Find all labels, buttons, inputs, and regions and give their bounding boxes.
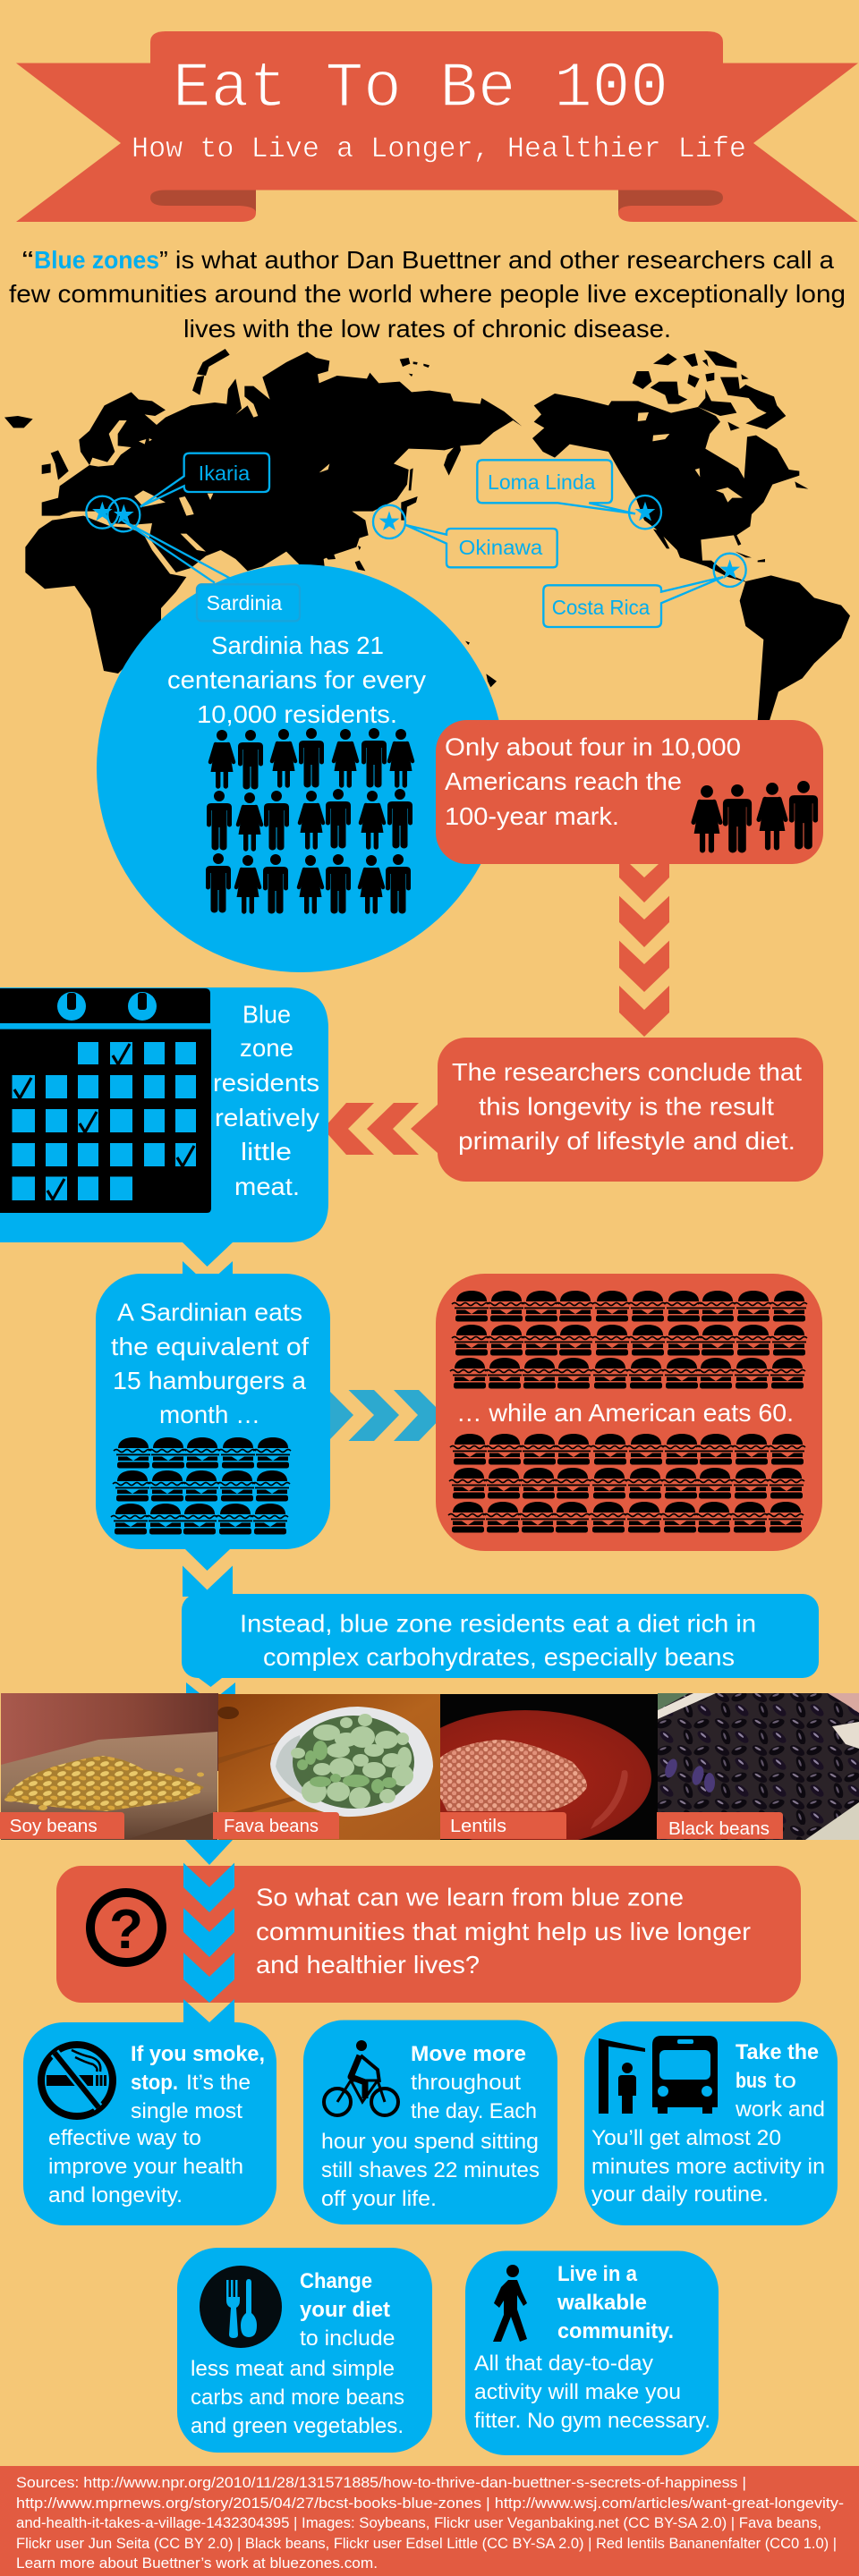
footer: sources xyxy=(0,2466,859,2576)
move text: throughout xyxy=(411,2071,521,2095)
question text: So what can we learn from blue zone xyxy=(256,1884,684,1911)
smoking text: effective way to xyxy=(48,2126,201,2150)
walkable text: walkable xyxy=(557,2291,647,2315)
label: fava beans: Fava beans xyxy=(224,1816,319,1836)
panel: only four in 10,000 Americans xyxy=(436,720,823,864)
panel: change your diet xyxy=(177,2248,432,2453)
diet text: to include xyxy=(300,2326,395,2351)
footer: sources: Sources: http://www.npr.org/2010/11/28/131571885/how-to-thrive-dan-buettner-s-secrets-of-happiness | xyxy=(16,2475,746,2491)
footer: sources: and-health-it-takes-a-village-1432304395 | Images: Soybeans, Flickr user Veganbaking.net (CC BY-SA 2.0) | Fava beans, xyxy=(16,2515,821,2531)
icon: question mark: ? xyxy=(109,1899,143,1961)
panel: instead, beans: Instead, blue zone residents eat a diet rich in xyxy=(240,1610,756,1637)
arrow: blue chevrons over question panel xyxy=(183,1863,234,2026)
photo: fava beans xyxy=(213,1694,440,1840)
callout outline: Costa Rica xyxy=(543,577,723,627)
callout outline: Okinawa xyxy=(405,525,557,567)
intro text: few communities around the world where people live exceptionally long xyxy=(9,280,846,308)
marker: Ikaria xyxy=(107,498,140,531)
sardinian text xyxy=(111,1299,309,1428)
question text xyxy=(256,1884,751,1979)
diet text: Change xyxy=(300,2269,372,2293)
little meat text: residents xyxy=(213,1069,319,1097)
diet text: and green vegetables. xyxy=(191,2414,404,2438)
footer: sources: Learn more about Buettner’s work at bluezones.com. xyxy=(16,2555,378,2572)
pictogram: 4 people xyxy=(693,781,818,853)
sardinia statistic text: 10,000 residents. xyxy=(197,700,397,728)
icon: cyclist xyxy=(324,2040,398,2115)
little meat text: relatively xyxy=(215,1104,319,1131)
walkable text: All that day-to-day xyxy=(474,2351,654,2376)
bus text: work and xyxy=(735,2097,825,2122)
photo: black beans xyxy=(657,1693,859,1840)
callout label: Okinawa: Okinawa xyxy=(459,536,542,559)
panel: researchers conclude: this longevity is the result xyxy=(479,1093,774,1120)
walkable text xyxy=(474,2262,710,2433)
sardinia statistic text: Sardinia has 21 xyxy=(211,631,384,659)
diet text: carbs and more beans xyxy=(191,2385,404,2410)
diet text xyxy=(191,2269,404,2438)
world map xyxy=(4,349,850,721)
panel: researchers conclude: primarily of lifestyle and diet. xyxy=(458,1127,795,1155)
pictogram: 60 hamburgers xyxy=(448,1291,807,1533)
intro text xyxy=(9,246,846,343)
little meat text: Blue xyxy=(242,1000,291,1029)
callout box: Sardinia xyxy=(197,584,300,621)
move text: the day. Each xyxy=(411,2099,537,2123)
question text: communities that might help us live longer xyxy=(256,1918,751,1945)
smoking text: improve your health xyxy=(48,2155,243,2179)
label: soy beans xyxy=(0,1812,124,1839)
arrow: blue pointer below photos xyxy=(185,1840,233,1865)
icon: calendar xyxy=(0,988,211,1213)
callout label: Ikaria: Ikaria xyxy=(199,462,250,485)
panel: move more xyxy=(303,2020,557,2224)
smoking text: and longevity. xyxy=(48,2183,183,2207)
move text: still shaves 22 minutes xyxy=(321,2158,540,2182)
sardinia statistic text xyxy=(167,631,426,728)
sardinian text: A Sardinian eats xyxy=(117,1299,302,1326)
panel: what can we learn xyxy=(56,1866,801,2003)
bus text xyxy=(591,2040,825,2207)
callout outline: Ikaria xyxy=(140,453,269,507)
arrow: red chevrons left xyxy=(323,1103,438,1155)
diet text: less meat and simple xyxy=(191,2357,395,2381)
little meat text: little xyxy=(241,1138,292,1165)
walkable text: Live in a xyxy=(557,2262,637,2286)
label: black beans: Black beans xyxy=(668,1818,770,1839)
diet text: your diet xyxy=(300,2298,390,2322)
panel: stop smoking xyxy=(23,2022,276,2225)
smoking text: It’s the xyxy=(186,2071,251,2095)
label: lentils: Lentils xyxy=(450,1816,506,1836)
marker: Costa Rica xyxy=(714,554,746,587)
title banner xyxy=(16,31,858,222)
arrow: red chevrons down xyxy=(619,864,669,1037)
panel: sardinian hamburgers xyxy=(96,1274,330,1571)
bus text: Take the xyxy=(736,2040,819,2064)
panel: instead, beans xyxy=(182,1594,819,1687)
bus text: to xyxy=(774,2069,796,2093)
sardinia statistic text: centenarians for every xyxy=(167,665,426,694)
arrow: blue chevron to sardinian panel xyxy=(183,1261,233,1284)
panel: researchers conclude: The researchers conclude that xyxy=(452,1058,802,1086)
sardinia pointer xyxy=(123,521,239,583)
panel: american hamburgers xyxy=(436,1274,822,1551)
smoking text: single most xyxy=(131,2099,242,2123)
sardinian text: the equivalent of xyxy=(111,1333,309,1360)
little meat text: zone xyxy=(240,1034,293,1062)
smoking text xyxy=(48,2042,265,2207)
sardinian text: 15 hamburgers a xyxy=(113,1367,306,1394)
bus text: your daily routine. xyxy=(591,2182,769,2207)
icon: walking person xyxy=(493,2265,527,2342)
americans text: Americans reach the xyxy=(445,767,682,795)
map markers and callouts xyxy=(86,453,746,627)
callout label: Loma Linda: Loma Linda xyxy=(488,470,596,494)
sardinian text: month … xyxy=(159,1401,260,1428)
panel: researchers conclude xyxy=(438,1038,823,1182)
american text: … while an American eats 60. xyxy=(456,1399,794,1427)
label: lentils xyxy=(440,1812,566,1839)
arrow: blue chevron to beans panel xyxy=(183,1565,233,1597)
move text: off your life. xyxy=(321,2187,437,2211)
little meat text xyxy=(213,1000,319,1200)
icon: question mark xyxy=(90,1893,162,1962)
panel: take the bus xyxy=(584,2021,838,2225)
arrow: blue chevron to photos xyxy=(186,1682,235,1702)
move text xyxy=(321,2042,540,2211)
icon: no smoking xyxy=(41,2045,113,2116)
americans text: Only about four in 10,000 xyxy=(445,733,741,760)
footer: sources: Flickr user Jun Seita (CC BY 2.0) | Black beans, Flickr user Edsel Little (CC BY-SA 2.0) | Red lentils Bananenfalter (CC0 1.0) | xyxy=(16,2536,837,2552)
walkable text: activity will make you xyxy=(474,2380,681,2404)
label: soy beans: Soy beans xyxy=(10,1816,98,1836)
sardinia circle xyxy=(97,564,505,972)
icon: bus stop xyxy=(599,2036,718,2114)
little meat text: meat. xyxy=(234,1173,300,1200)
arrow: teal chevrons right xyxy=(330,1390,444,1441)
intro text: “ xyxy=(21,246,34,274)
icon: fork and spoon xyxy=(200,2266,282,2348)
bus text: bus xyxy=(736,2069,767,2093)
move text: Move more xyxy=(411,2042,526,2066)
smoking text: If you smoke, xyxy=(131,2042,265,2066)
label: black beans xyxy=(657,1812,783,1839)
walkable text: community. xyxy=(557,2319,674,2343)
intro text: Blue zones xyxy=(34,246,159,274)
americans text: 100-year mark. xyxy=(445,802,619,830)
callout outline: Loma Linda xyxy=(477,460,635,513)
footer: sources: http://www.mprnews.org/story/2015/04/27/bcst-books-blue-zones | http://www.wsj.com/articles/want-great-longevity- xyxy=(16,2496,844,2512)
intro text: lives with the low rates of chronic disease. xyxy=(183,315,671,343)
question text: and healthier lives? xyxy=(256,1951,480,1979)
pictogram: 21 people xyxy=(206,728,412,914)
title: Eat To Be 100 xyxy=(173,54,668,125)
americans text xyxy=(445,733,741,830)
marker: Okinawa xyxy=(373,505,405,538)
callout label: Sardinia: Sardinia xyxy=(207,591,282,614)
subtitle: How to Live a Longer, Healthier Life xyxy=(132,132,746,165)
pictogram: 15 hamburgers xyxy=(111,1437,291,1535)
callout label: Costa Rica: Costa Rica xyxy=(552,596,650,619)
walkable text: fitter. No gym necessary. xyxy=(474,2409,710,2433)
smoking text: stop. xyxy=(131,2071,178,2095)
intro text: ” is what author Dan Buettner and other researchers call a xyxy=(159,246,834,274)
panel: instead, beans: complex carbohydrates, especially beans xyxy=(263,1643,735,1671)
bus text: minutes more activity in xyxy=(591,2155,825,2179)
panel: walkable community xyxy=(465,2250,719,2455)
photo: lentils xyxy=(440,1694,658,1840)
label: fava beans xyxy=(213,1812,339,1839)
bus text: You’ll get almost 20 xyxy=(591,2126,781,2150)
marker: Sardinia xyxy=(86,496,118,529)
move text: hour you spend sitting xyxy=(321,2130,539,2154)
marker: Loma Linda xyxy=(629,496,661,529)
panel: little meat xyxy=(0,987,328,1267)
photo: soy beans xyxy=(0,1693,218,1840)
